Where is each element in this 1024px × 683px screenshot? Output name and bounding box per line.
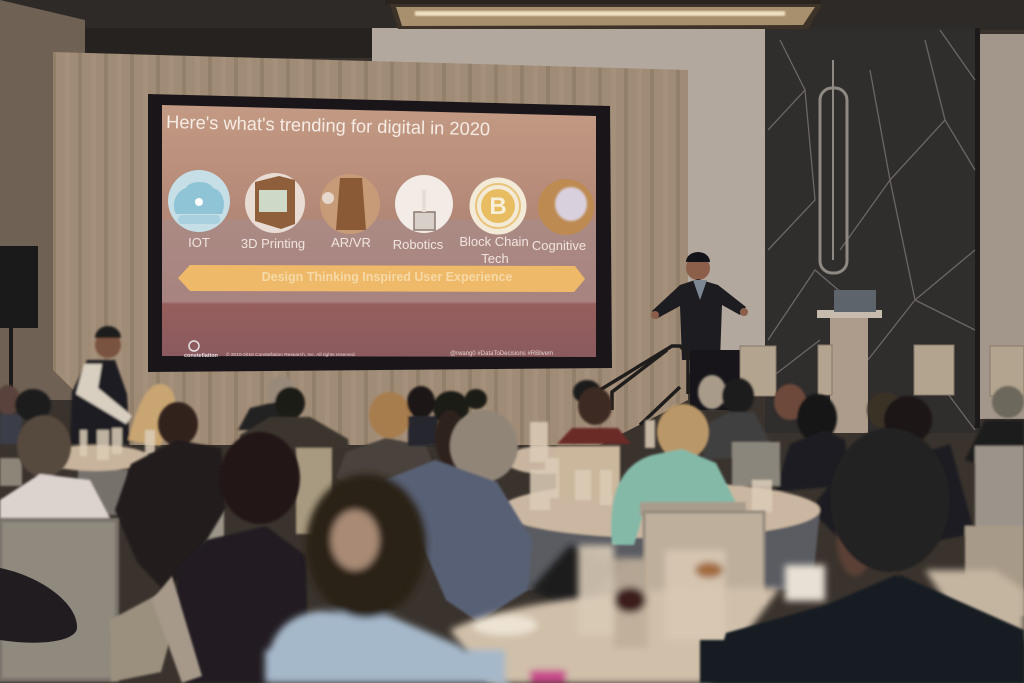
center chair xyxy=(640,502,764,602)
projection screen xyxy=(148,94,612,372)
icon labels xyxy=(188,234,586,266)
glasses xyxy=(80,420,772,512)
man in black suit left xyxy=(115,402,226,592)
wall sconce xyxy=(820,60,847,273)
row of back heads xyxy=(0,385,20,415)
left front chair xyxy=(0,520,181,682)
icon labels: Cognitive xyxy=(532,238,586,253)
icon labels: 3D Printing xyxy=(241,236,305,251)
man in white shirt left xyxy=(0,415,110,526)
icon: AR/VR xyxy=(320,174,380,234)
back tables xyxy=(78,470,128,515)
icon labels: IOT xyxy=(188,235,210,250)
lectern with laptop xyxy=(817,290,882,433)
dark bag on chair xyxy=(530,545,625,605)
person in dark sleeve lower left xyxy=(0,568,77,643)
presenter xyxy=(651,252,748,410)
icon: Robotics xyxy=(395,175,453,233)
icon: Cognitive xyxy=(538,179,594,235)
banner arrow xyxy=(178,265,585,292)
banner arrow: Design Thinking Inspired User Experience xyxy=(262,270,512,284)
speaker on stand xyxy=(0,246,38,388)
curtain xyxy=(53,52,688,445)
icon: Bitcoin: B xyxy=(489,193,507,220)
slide footer xyxy=(184,341,553,359)
seated man in plaid xyxy=(385,410,532,622)
slide title: Here's what's trending for digital in 2020 xyxy=(166,111,490,139)
slide footer: constellation xyxy=(184,353,219,359)
slide footer: © 2010-2018 Constellation Research, Inc. All rights reserved. xyxy=(226,351,356,358)
blond woman xyxy=(128,384,175,446)
stage handrails xyxy=(600,346,688,425)
icon: Bitcoin xyxy=(470,178,526,234)
back audience and tables xyxy=(0,326,1024,616)
man dark hair center xyxy=(176,432,308,683)
icon labels: AR/VR xyxy=(331,235,371,250)
icon: 3D printing xyxy=(245,173,305,233)
stage chairs xyxy=(740,345,1024,396)
icon labels: Tech xyxy=(481,251,509,266)
patterned dark wall xyxy=(768,30,975,430)
woman in mint jacket xyxy=(611,404,736,545)
man in foreground blue shirt xyxy=(265,474,510,683)
chairs xyxy=(296,448,332,534)
waiter xyxy=(70,326,132,444)
slide footer: @rwang0 #DataToDecisions #RBlivem xyxy=(450,351,553,357)
icon labels: Robotics xyxy=(393,237,444,252)
man in foreground dark suit xyxy=(700,428,1024,683)
ceiling light fixture xyxy=(385,0,822,29)
icon: IOT cloud xyxy=(168,170,230,232)
front table xyxy=(450,545,1024,683)
chair front center xyxy=(152,576,202,683)
icon labels: Block Chain xyxy=(459,234,529,249)
